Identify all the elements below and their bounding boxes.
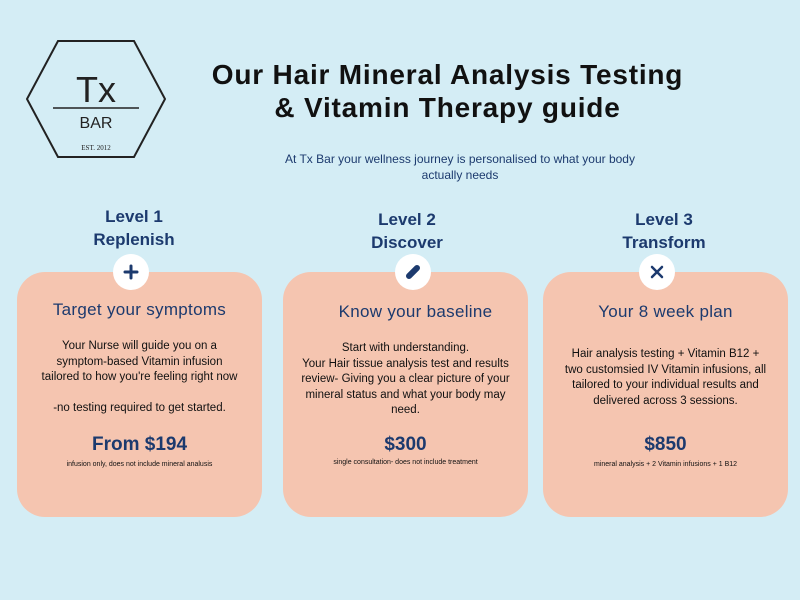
- logo: BAR: [80, 115, 112, 132]
- logo: [26, 40, 166, 158]
- card text: Your Nurse will guide you on a symptom-based Vitamin infusion tailored to how you're feeling right now: [42, 340, 237, 383]
- level 2 heading: Discover: [371, 233, 443, 252]
- panel: level 3: [543, 272, 788, 517]
- level 1 heading: Replenish: [93, 230, 175, 249]
- level 1 heading: Level 1: [105, 207, 163, 226]
- panel: level 1: [17, 272, 262, 517]
- level 3 heading: Level 3: [635, 210, 693, 229]
- level 2 heading: Level 2: [378, 210, 436, 229]
- card text: [42, 340, 238, 414]
- logo: Tx: [76, 69, 116, 110]
- icon: syringe: [639, 254, 675, 290]
- card heading: Your 8 week plan: [598, 302, 733, 321]
- card text: Hair analysis testing + Vitamin B12 + two customsied IV Vitamin infusions, all tailored to your individual results and delivered across 3 sessions.: [565, 348, 766, 406]
- icon: cross: [113, 254, 149, 290]
- title: Our Hair Mineral Analysis Testing: [212, 59, 683, 90]
- subtitle: At Tx Bar your wellness journey is personalised to what your body: [285, 152, 635, 166]
- title: [212, 59, 683, 123]
- price: $300: [384, 434, 427, 455]
- price: $850: [644, 434, 687, 455]
- card text: -no testing required to get started.: [53, 402, 226, 414]
- level 3 heading: Transform: [622, 233, 706, 252]
- price note: mineral analysis + 2 Vitamin infusions + 1 B12: [594, 461, 737, 468]
- subtitle: actually needs: [422, 168, 498, 182]
- level 2 heading: [371, 210, 443, 252]
- card heading: Know your baseline: [339, 302, 492, 321]
- title: & Vitamin Therapy guide: [274, 92, 621, 123]
- panel: level 2: [283, 272, 528, 517]
- price: From $194: [92, 434, 187, 455]
- level 3 heading: [622, 210, 706, 252]
- price note: infusion only, does not include mineral analusis: [67, 461, 212, 468]
- price note: single consultation- does not include treatment: [333, 459, 478, 466]
- card text: Your Hair tissue analysis test and results review- Giving you a clear picture of your mineral status and what your body may need.: [301, 358, 510, 416]
- logo: EST. 2012: [81, 144, 111, 152]
- subtitle: [285, 152, 635, 182]
- card text: Start with understanding.: [342, 342, 469, 354]
- level 1 heading: [93, 207, 175, 249]
- card heading: Target your symptoms: [53, 300, 226, 319]
- icon: pill: [395, 254, 431, 290]
